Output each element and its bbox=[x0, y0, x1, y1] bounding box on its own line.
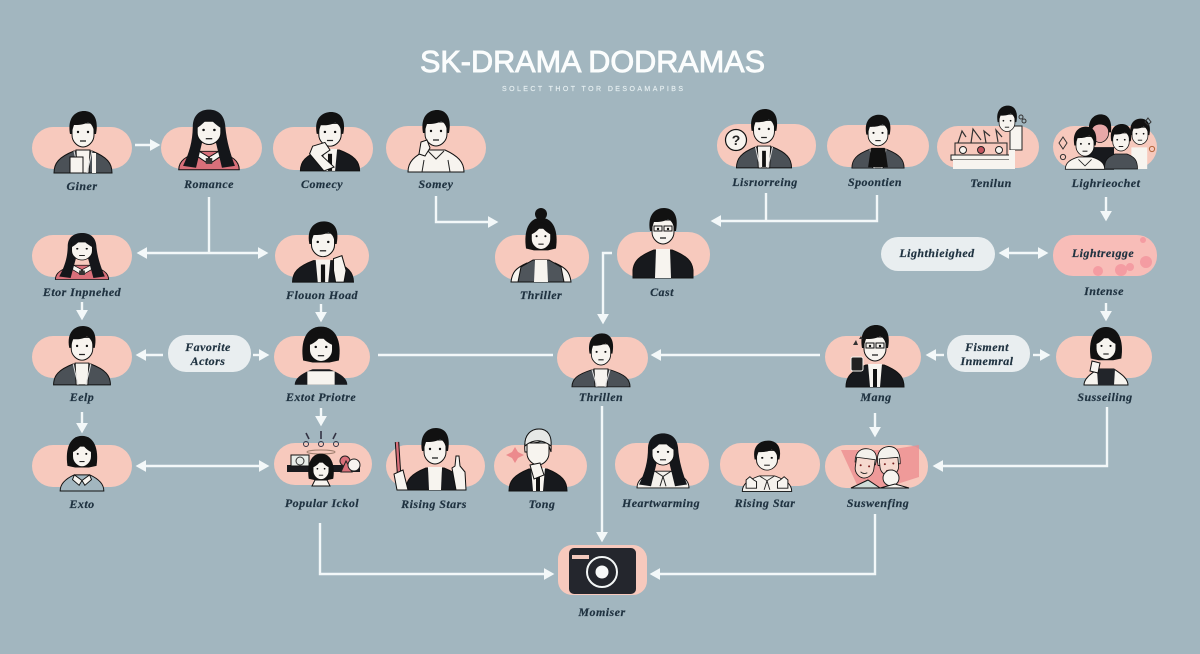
connector: Extot to Thrillen bbox=[378, 354, 553, 356]
arrow: Mang to Thrillen bbox=[653, 354, 820, 356]
label: Thriller bbox=[520, 288, 562, 302]
icon: sparkle bbox=[506, 447, 524, 463]
label: Fisment bbox=[964, 340, 1009, 354]
icon: man with silver hair bbox=[509, 429, 567, 491]
icon: man in grey hoodie jacket bbox=[736, 109, 792, 168]
node: Mang bbox=[825, 325, 921, 404]
label: Mang bbox=[859, 390, 892, 404]
callout: Favorite Actors bbox=[168, 335, 251, 372]
pill bbox=[558, 545, 647, 595]
label: Lighthieighed bbox=[898, 246, 975, 260]
icon: question badge: ? bbox=[732, 132, 740, 148]
pill with blotches bbox=[1053, 235, 1157, 276]
connector: Romance down to branch bbox=[208, 197, 210, 253]
pill bbox=[386, 445, 485, 487]
label: Somey bbox=[419, 177, 454, 191]
icon: man covering mouth bbox=[300, 112, 360, 171]
node: Lisrorreing bbox=[717, 109, 816, 189]
icon: woman with long hair in white shirt bbox=[637, 433, 689, 488]
label: Popular Ickol bbox=[285, 496, 359, 510]
pill bbox=[168, 335, 251, 372]
pill bbox=[937, 126, 1039, 168]
icon: man in suit bbox=[293, 221, 353, 282]
arrow: Lighthieighed to Lightreige bbox=[1001, 252, 1046, 254]
label: Comecy bbox=[301, 177, 343, 191]
icon: man in turtleneck bbox=[852, 115, 904, 168]
pill bbox=[557, 337, 648, 379]
node: Comedy bbox=[273, 112, 373, 191]
label: Eelp bbox=[69, 390, 94, 404]
icon: woman with hair bun bbox=[511, 208, 571, 282]
subtitle: SOLECT THOT TOR DESOAMAPIBS bbox=[502, 86, 683, 93]
icon: woman with bob bbox=[295, 327, 347, 385]
icon: woman in vest bbox=[1084, 327, 1128, 385]
node: Cast bbox=[617, 208, 710, 299]
node: Flouon Hoad bbox=[275, 221, 369, 302]
node: Somey bbox=[386, 110, 486, 191]
node: Momiser bbox=[558, 545, 647, 619]
label: Romance bbox=[183, 177, 234, 191]
arrow: Susseiling to Suswenfing bbox=[935, 407, 1107, 466]
pill bbox=[1053, 126, 1157, 168]
arrow: Thrillen to Momiser bbox=[601, 406, 603, 540]
pill bbox=[947, 335, 1030, 372]
pill bbox=[494, 445, 587, 487]
arrow: Popular to Momiser bbox=[320, 523, 552, 574]
label line two: Actors bbox=[190, 354, 225, 368]
arrow: Fisment to Susseiling bbox=[1033, 354, 1048, 356]
pill bbox=[720, 443, 820, 486]
node: Susseiling bbox=[1056, 327, 1152, 404]
node: Etor Inpnehed bbox=[32, 233, 132, 299]
label: Suswenfing bbox=[847, 496, 909, 510]
pill bbox=[32, 127, 132, 169]
arrow: Etor to Eelp bbox=[81, 302, 83, 318]
node: Extot Priotre bbox=[274, 327, 370, 404]
label line two: Inmemral bbox=[960, 354, 1014, 368]
label: Extot Priotre bbox=[285, 390, 356, 404]
pill bbox=[1056, 336, 1152, 378]
node: Suswenfing bbox=[825, 445, 928, 510]
node: Romance bbox=[161, 110, 262, 191]
callout: Fisment Inmemral bbox=[947, 335, 1030, 372]
icon: woman with long hair bbox=[55, 233, 109, 280]
pill bbox=[827, 125, 929, 167]
label: Etor Inpnehed bbox=[42, 285, 122, 299]
node: Lightreige / Intense bbox=[1053, 235, 1157, 298]
node: Heartwarming bbox=[615, 433, 709, 510]
node: Lighthieighed bbox=[881, 237, 995, 271]
node: Tong bbox=[494, 429, 587, 511]
arrow: Eelp to Exto bbox=[81, 412, 83, 431]
title: SK-DRAMA DODRAMAS bbox=[420, 44, 765, 79]
arrow: Giner to Romance bbox=[135, 144, 158, 146]
icon: presenter with paper bbox=[54, 111, 112, 173]
arrow: Favorite to Extot bbox=[253, 354, 267, 356]
icon: camera bbox=[569, 548, 636, 594]
icon: man with curly hair bbox=[54, 326, 110, 385]
label: Flouon Hoad bbox=[285, 288, 359, 302]
connector: Lisrorreing down to branch bbox=[765, 193, 767, 221]
label: Susseiling bbox=[1077, 390, 1133, 404]
node: Giner bbox=[32, 111, 132, 193]
pill bbox=[273, 127, 373, 170]
node: Thrillen bbox=[557, 333, 648, 404]
label: Tong bbox=[529, 497, 555, 511]
arrow: Suswenfing to Momiser bbox=[652, 514, 875, 574]
label: Spoontien bbox=[848, 175, 902, 189]
pill bbox=[617, 232, 710, 277]
label: Lightreıgge bbox=[1071, 246, 1134, 260]
pill bbox=[32, 235, 132, 277]
label: Lighrieochet bbox=[1071, 176, 1141, 190]
pill bbox=[386, 126, 486, 170]
icon: man in grey suit bbox=[572, 333, 630, 387]
arrow: Mang to Suswenfing bbox=[874, 413, 876, 435]
icon: family group bbox=[1059, 114, 1155, 170]
icon: man with glasses bbox=[633, 208, 693, 278]
pill bbox=[825, 336, 921, 378]
label: Intense: Intense bbox=[1083, 284, 1124, 298]
icon: man in hoodie bbox=[408, 110, 464, 172]
arrow: Cast to Thrillen bbox=[603, 253, 612, 322]
arrow: Lighrieochet to Lightreige bbox=[1105, 197, 1107, 219]
label: Tenilun bbox=[970, 176, 1012, 190]
label: Giner bbox=[67, 179, 97, 193]
arrow: Spoonien to Cast bbox=[713, 195, 877, 221]
label: Thrillen bbox=[579, 390, 623, 404]
pill bbox=[274, 336, 370, 378]
pill bbox=[615, 443, 709, 486]
icon: man with thumbs up bbox=[742, 441, 792, 491]
label: Cast bbox=[650, 285, 674, 299]
icon: two laughing friends bbox=[841, 445, 919, 488]
pill bbox=[825, 445, 928, 488]
pill bbox=[717, 124, 816, 167]
icon: idol with crown and desk bbox=[287, 431, 360, 486]
label: Lisrıorreing bbox=[731, 175, 798, 189]
pill bbox=[275, 235, 369, 277]
label: Heartwarming bbox=[621, 496, 700, 510]
node: Rising Stars bbox=[386, 428, 485, 511]
pill bbox=[881, 237, 995, 271]
arrow: Romance branches to Etor and Flouon bbox=[139, 252, 266, 254]
label: Rising Stars bbox=[400, 497, 467, 511]
arrow: Flouon to Extot bbox=[320, 304, 322, 320]
label: Favorite bbox=[184, 340, 231, 354]
node: Tenilun bbox=[937, 106, 1039, 190]
pill bbox=[274, 443, 372, 485]
label: Rising Star bbox=[734, 496, 795, 510]
icon: man with glasses holding object bbox=[846, 325, 904, 387]
label: Momiser bbox=[577, 605, 626, 619]
node: Thriller bbox=[495, 208, 589, 302]
arrow: Somey to Thriller bbox=[436, 196, 496, 222]
node: Rising Star bbox=[720, 441, 820, 510]
pill bbox=[32, 336, 132, 378]
node: Exto bbox=[32, 436, 132, 511]
icon: woman in pink blouse bbox=[179, 110, 239, 170]
icon: woman in shirt bbox=[60, 436, 104, 491]
node: Eelp bbox=[32, 326, 132, 404]
pill bbox=[495, 235, 589, 280]
node: Popular Ickol bbox=[274, 431, 372, 510]
icon: man with pointer stick bbox=[394, 428, 466, 490]
pill bbox=[32, 445, 132, 487]
icon: chef at steaming counter bbox=[951, 106, 1026, 169]
label: Exto bbox=[68, 497, 95, 511]
arrow: Fisment to Mang bbox=[928, 354, 944, 356]
arrow: Favorite to Eelp bbox=[138, 354, 163, 356]
arrow: Exto to Popular bbox=[138, 465, 267, 467]
arrow: Extot to Popular bbox=[320, 408, 322, 424]
pill bbox=[161, 127, 262, 169]
node: Spoonien bbox=[827, 115, 929, 189]
arrow: Intense to Susseiling bbox=[1105, 303, 1107, 319]
node: Lighrieochet bbox=[1053, 114, 1157, 190]
